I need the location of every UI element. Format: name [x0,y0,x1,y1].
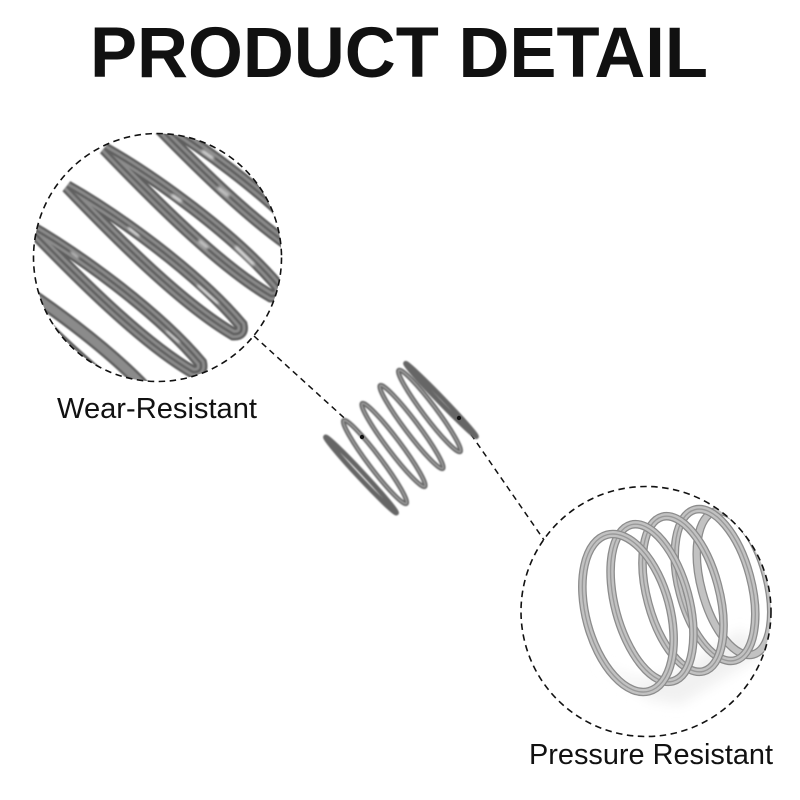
coil 3 [357,400,430,490]
magnified coils [578,504,771,696]
dashed circle: pressure-resistant [521,486,771,736]
panel: wear-resistant magnified spring [32,132,282,382]
anchor dot: right connector [457,416,461,420]
label: Wear-Resistant: Wear-Resistant [57,393,257,425]
title: PRODUCT DETAIL [90,14,708,93]
connector line: wear-resistant callout to spring [254,336,363,435]
central spring [323,362,478,515]
coil 2 [339,417,411,507]
coil 6 [404,362,478,438]
shadow [633,634,759,702]
coil 5 [394,366,465,456]
dashed circle: wear-resistant [34,134,282,382]
magnified coils [34,134,282,381]
connector line: pressure-resistant callout to spring [459,417,544,540]
label: Pressure Resistant: Pressure Resistant [529,739,773,771]
panel: pressure-resistant magnified spring [521,486,785,736]
anchor dot: left connector [360,435,364,439]
coil 4 [375,382,448,472]
coil 1 [323,435,399,515]
